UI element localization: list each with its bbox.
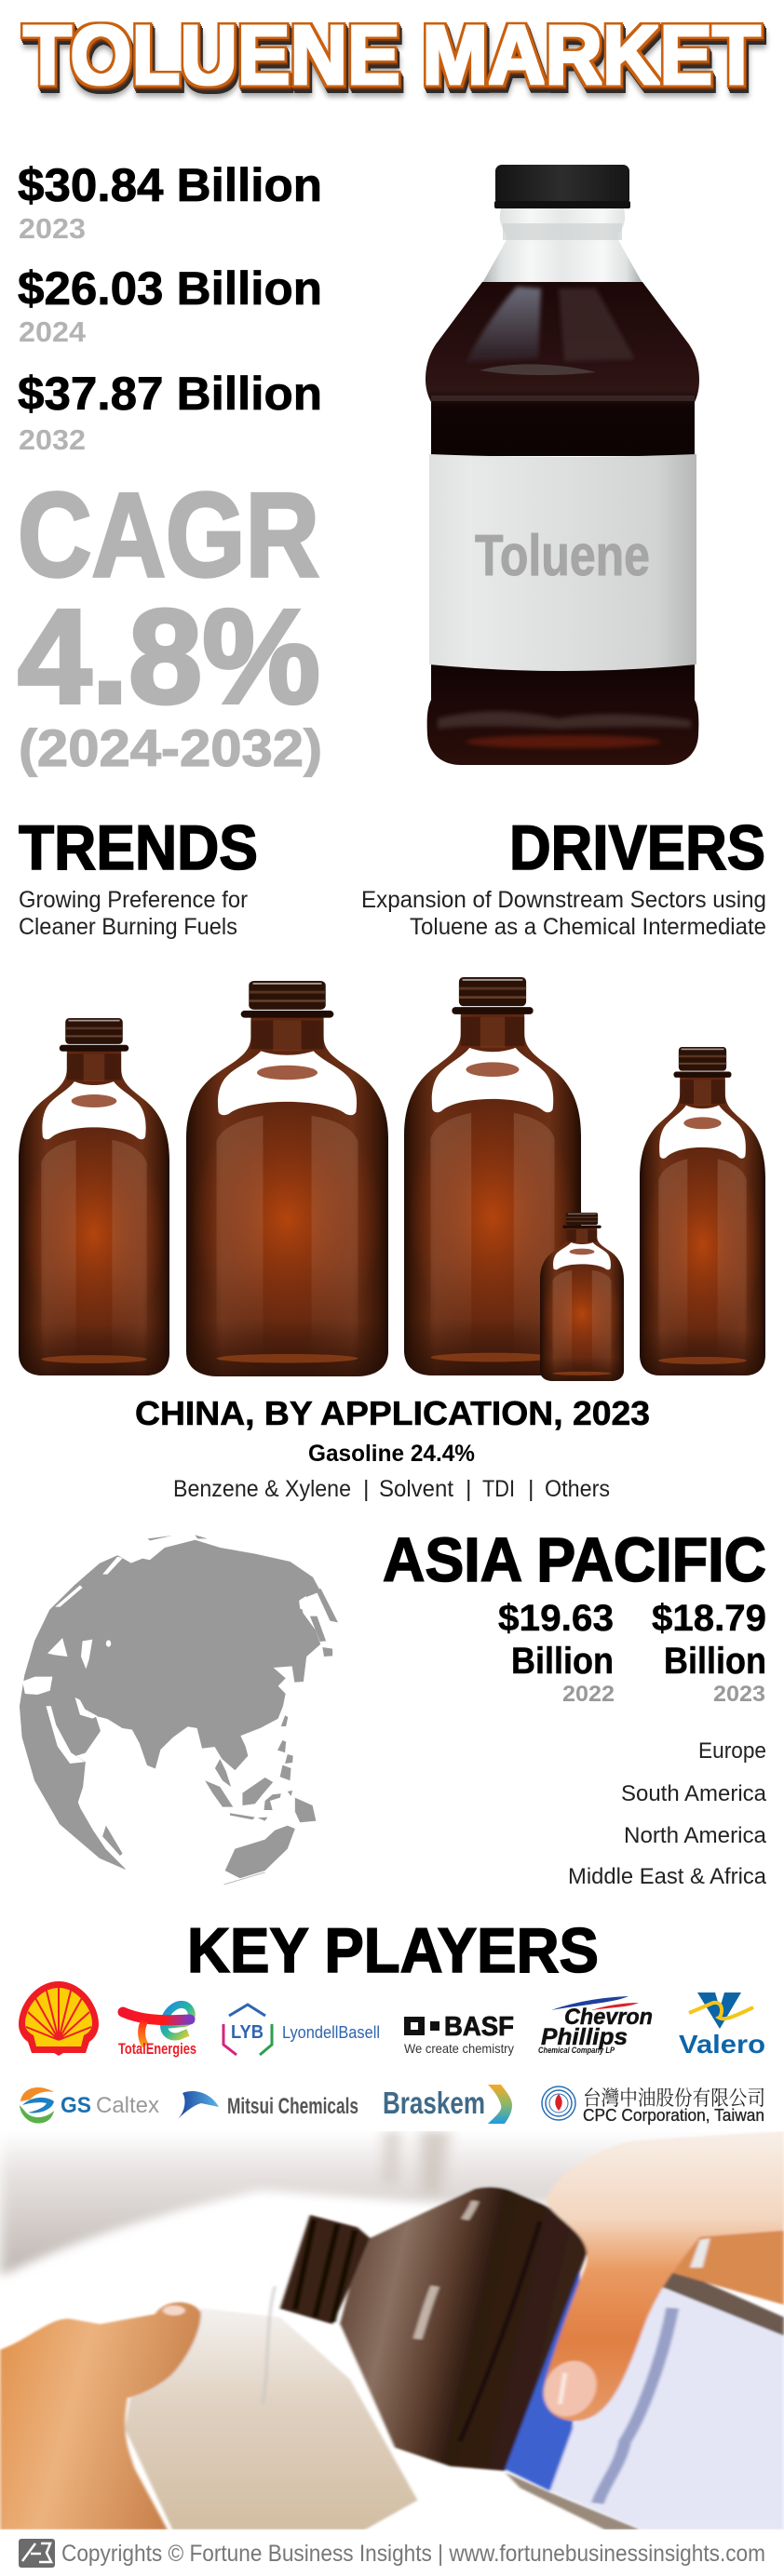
logo: totalenergies	[118, 2005, 196, 2058]
china by application: |	[466, 1476, 471, 1502]
drivers: Expansion of Downstream Sectors using	[361, 887, 766, 913]
asia pacific 2023 value	[652, 1598, 766, 1707]
asia pacific 2023 value: 2023	[713, 1682, 765, 1707]
logo: mitsui chemicals	[177, 2091, 358, 2120]
asia pacific 2022 value	[498, 1598, 615, 1707]
china by application: CHINA, BY APPLICATION, 2023	[135, 1394, 650, 1432]
logo: chevron phillips	[538, 1996, 653, 2055]
logo: chevron phillips: Chevron	[564, 2005, 653, 2030]
trends	[19, 812, 258, 940]
logo: totalenergies: TotalEnergies	[118, 2040, 196, 2058]
drivers: DRIVERS	[509, 812, 765, 883]
drivers	[361, 812, 766, 940]
logo: cpc corporation: 台灣中油股份有限公司	[583, 2086, 765, 2110]
amber bottles	[19, 977, 765, 1381]
china by application: Benzene & Xylene	[173, 1476, 351, 1502]
logo: basf: We create chemistry	[404, 2041, 514, 2056]
drivers: Toluene as a Chemical Intermediate	[410, 914, 766, 940]
china by application: |	[528, 1476, 534, 1502]
CAGR block: 4.8%	[18, 582, 320, 731]
key players heading: KEY PLAYERS	[187, 1915, 599, 1986]
photo bottle	[340, 2187, 595, 2471]
globe map	[20, 1535, 338, 1885]
logo: shell	[19, 1981, 99, 2056]
market value 2032: $37.87 Billion	[18, 368, 322, 420]
CAGR block: (2024-2032)	[19, 718, 322, 777]
market value 2023: $30.84 Billion	[18, 159, 322, 211]
market value 2024	[18, 262, 322, 348]
CAGR block: CAGR	[18, 469, 319, 602]
other regions list: Europe	[698, 1738, 766, 1764]
footer logo	[19, 2539, 55, 2568]
logo: lyondellbasell	[223, 2005, 380, 2055]
logo: cpc corporation	[542, 2086, 765, 2125]
logo: valero: Valero	[679, 2030, 765, 2059]
trends: Cleaner Burning Fuels	[19, 914, 237, 940]
logo: cpc corporation: CPC Corporation, Taiwan	[583, 2106, 764, 2125]
china by application: TDI	[482, 1476, 515, 1502]
title: TOLUENE MARKET	[23, 9, 761, 102]
bottle label text: Toluene	[475, 524, 650, 588]
market value 2023	[18, 159, 322, 245]
photo: pouring toluene onto tissue	[0, 2131, 784, 2529]
market value 2024: 2024	[19, 315, 87, 348]
logo: gs caltex: Caltex	[96, 2093, 159, 2118]
market value 2032	[18, 368, 322, 456]
china by application: Others	[545, 1476, 610, 1502]
logo: gs caltex: GS	[61, 2093, 91, 2118]
other regions list: Middle East & Africa	[568, 1864, 767, 1889]
logo: gs caltex	[20, 2087, 159, 2124]
asia pacific 2022 value: $19.63	[498, 1598, 614, 1639]
china by application: Solvent	[379, 1476, 453, 1502]
logo: braskem: Braskem	[383, 2086, 485, 2120]
logo: lyondellbasell: LyondellBasell	[282, 2023, 380, 2042]
other regions list: South America	[621, 1781, 767, 1806]
asia pacific 2022 value: Billion	[511, 1641, 614, 1682]
logo: chevron phillips: Phillips	[541, 2024, 628, 2050]
asia pacific 2022 value: 2022	[562, 1682, 615, 1707]
CAGR block	[18, 469, 322, 777]
logo: valero	[679, 1992, 765, 2059]
photo label	[550, 2287, 784, 2529]
trends: Growing Preference for	[19, 887, 248, 913]
china by application: Gasoline 24.4%	[308, 1441, 475, 1467]
market value 2024: $26.03 Billion	[18, 262, 322, 315]
market value 2023: 2023	[19, 212, 86, 245]
asia pacific heading: ASIA PACIFIC	[383, 1525, 766, 1595]
toluene bottle	[426, 165, 699, 765]
logo: basf: BASF	[444, 2012, 514, 2042]
photo left hand	[0, 2302, 201, 2529]
photo right hand	[665, 2231, 784, 2305]
market value 2032: 2032	[19, 423, 86, 456]
logo: chevron phillips: Chemical Company LP	[538, 2046, 615, 2055]
logo: lyondellbasell: LYB	[231, 2022, 264, 2043]
logo: basf	[404, 2012, 514, 2056]
other regions list: North America	[624, 1823, 767, 1848]
asia pacific 2023 value: $18.79	[652, 1598, 766, 1639]
photo background	[0, 2131, 784, 2277]
asia pacific 2023 value: Billion	[664, 1641, 766, 1682]
china by application	[135, 1394, 650, 1502]
china by application: |	[363, 1476, 369, 1502]
trends: TRENDS	[19, 812, 258, 883]
other regions list	[568, 1738, 767, 1889]
photo tissue	[125, 2308, 417, 2529]
logo: mitsui chemicals: Mitsui Chemicals	[227, 2094, 358, 2119]
